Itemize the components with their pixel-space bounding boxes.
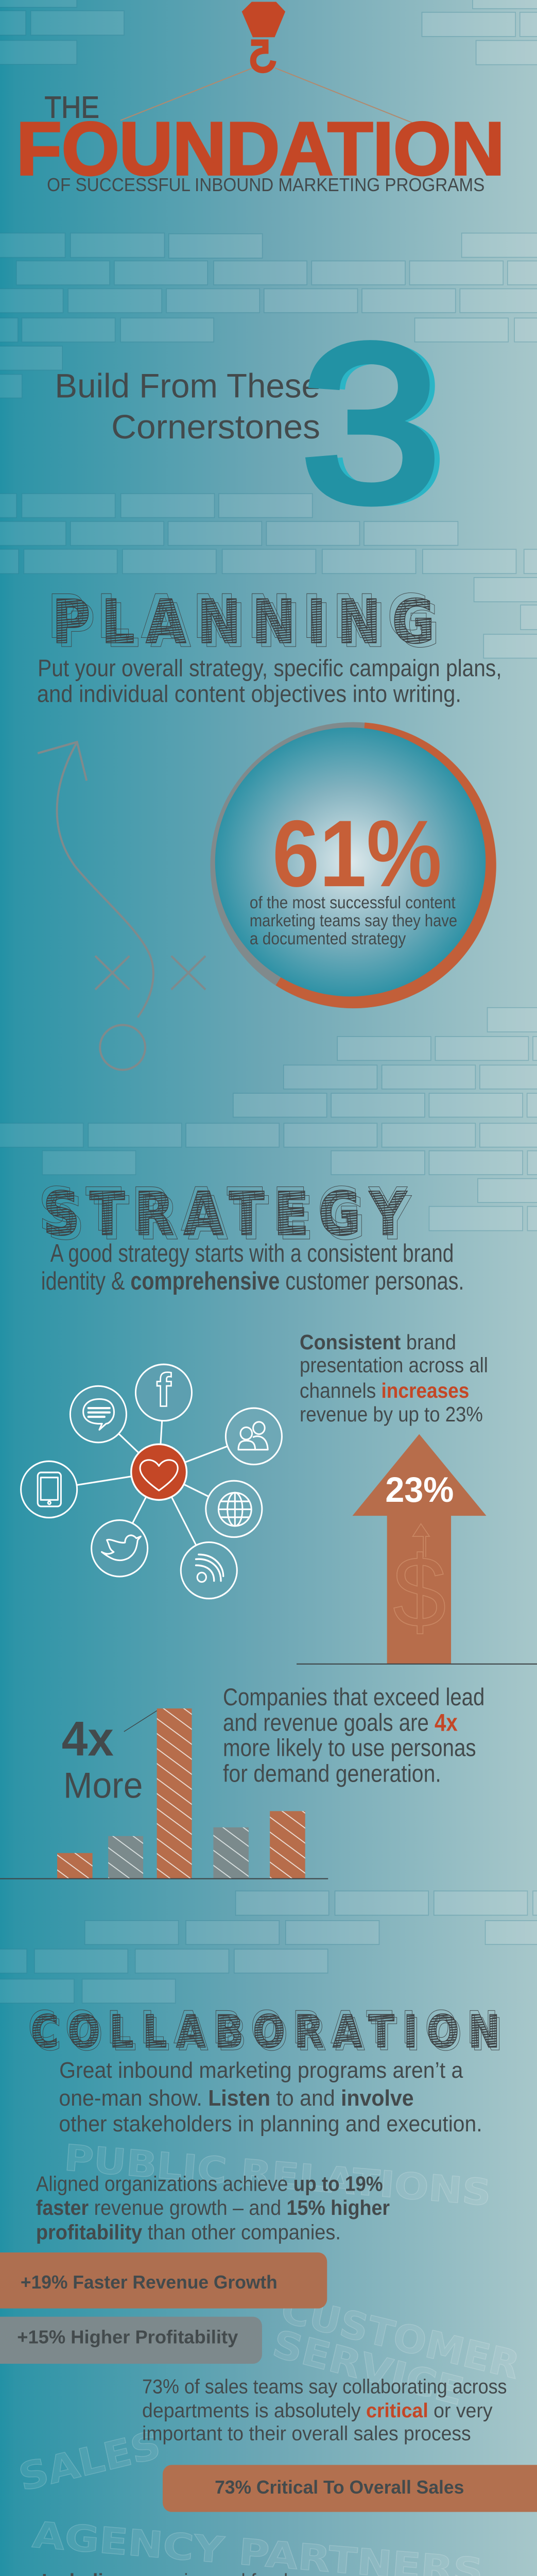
pill: critical to overall sales: 73% Critical To Overall Sales — [215, 2477, 464, 2498]
pill: higher profitability: +15% Higher Profitability — [17, 2327, 238, 2348]
heading: build from these cornerstones — [55, 367, 320, 446]
icon: play diagram with arrow — [38, 742, 205, 1070]
text: consistent brand presentation — [300, 1331, 488, 1426]
stat caption: marketing teams say they have — [250, 910, 457, 930]
stat caption — [250, 892, 457, 948]
arrow: 23% growth: 23% — [385, 1470, 454, 1510]
pill: faster revenue growth — [0, 2252, 327, 2309]
heading: build from these cornerstones: Cornerstones — [111, 408, 320, 446]
icon: crane hook — [120, 2, 413, 123]
planning intro text — [37, 654, 502, 707]
text: companies that exceed goals: Companies that exceed lead — [223, 1683, 484, 1710]
text: companies that exceed goals — [223, 1683, 484, 1787]
text: companies that exceed goals: for demand generation. — [223, 1759, 441, 1787]
heading: STRATEGY: STRATEGY — [43, 1179, 416, 1249]
big number 3: 3 — [307, 299, 448, 549]
ghost word: customer: CUSTOMER — [277, 2286, 524, 2387]
icon: rss — [196, 1554, 223, 1582]
section: personas — [0, 1683, 512, 2244]
stat value: 61% — [272, 801, 442, 906]
text: aligned organizations: faster revenue growth – and 15% higher — [36, 2196, 390, 2219]
collaboration intro text: one-man show. Listen to and involve — [59, 2086, 414, 2110]
collaboration intro text: Great inbound marketing programs aren’t a — [59, 2058, 463, 2082]
text: consistent brand presentation: channels increases — [300, 1379, 469, 1402]
heading: build from these cornerstones: Build From These — [55, 367, 320, 405]
stat caption: of the most successful content — [250, 892, 456, 912]
title: subtitle: OF SUCCESSFUL INBOUND MARKETING PROGRAMS — [47, 174, 484, 195]
text: aligned organizations: Aligned organizations achieve up to 19% — [36, 2173, 383, 2196]
heading: PLANNING: PLANNING — [57, 590, 451, 661]
pill: higher profitability — [0, 2317, 262, 2364]
label: 4x more: More — [63, 1766, 143, 1806]
text: consistent brand presentation: presentation across all — [300, 1354, 488, 1377]
ghost word: service: SERVICE — [269, 2321, 468, 2414]
heading: PLANNING: PLANNING — [47, 582, 441, 652]
text: consistent brand presentation: Consistent brand — [300, 1331, 456, 1354]
text: companies that exceed goals: more likely to use personas — [223, 1734, 476, 1761]
pill: critical to overall sales — [163, 2465, 537, 2512]
header section — [16, 2, 505, 549]
icon: bird — [102, 1535, 141, 1561]
network diagram: channels — [21, 1364, 282, 1599]
section: alignment stats — [0, 2252, 537, 2576]
title: FOUNDATION: FOUNDATION — [16, 107, 505, 191]
label: 4x more: 4x — [62, 1711, 114, 1766]
text: sales teams — [142, 2376, 507, 2445]
stat circle: 61% — [210, 722, 496, 1008]
heading: PLANNING: PLANNING — [52, 587, 446, 657]
ghost word: public relations: PUBLIC RELATIONS — [63, 2138, 493, 2214]
label: 4x more — [62, 1710, 158, 1806]
icon: globe — [218, 1493, 251, 1526]
section: planning — [37, 582, 502, 1070]
stat caption: a documented strategy — [250, 928, 406, 948]
icon: people — [238, 1422, 268, 1450]
section: strategy — [21, 1175, 537, 1664]
ghost word: sales: SALES — [15, 2422, 164, 2500]
strategy intro text: identity & comprehensive customer personas. — [41, 1267, 464, 1295]
collaboration intro text: other stakeholders in planning and execution. — [59, 2111, 482, 2136]
text: companies that exceed goals: and revenue goals are 4x — [223, 1709, 458, 1736]
icon: chat bubble — [83, 1399, 114, 1430]
heading: STRATEGY: STRATEGY — [39, 1175, 417, 1245]
icon: dollar with arrow: $ — [393, 1535, 446, 1649]
title: THE: THE — [44, 90, 99, 125]
heading: STRATEGY: STRATEGY — [47, 1183, 421, 1253]
icon: tablet — [38, 1472, 61, 1506]
pill: faster revenue growth: +19% Faster Revenue Growth — [21, 2272, 278, 2293]
text: aligned organizations: profitability than other companies. — [36, 2221, 341, 2244]
icon: facebook: f — [157, 1364, 171, 1416]
arrow: 23% growth — [297, 1434, 537, 1664]
text: aligned organizations — [36, 2173, 390, 2244]
planning intro text: Put your overall strategy, specific campaign plans, — [38, 654, 502, 682]
text: sales teams: departments is absolutely critical or very — [142, 2399, 493, 2422]
strategy intro text: A good strategy starts with a consistent brand — [50, 1240, 454, 1267]
text: sales teams: important to their overall sales process — [142, 2422, 471, 2445]
strategy intro text — [41, 1240, 464, 1295]
icon: heart hub — [131, 1444, 187, 1500]
planning intro text: and individual content objectives into writing. — [37, 680, 461, 707]
text: sales teams: 73% of sales teams say collaborating across — [142, 2376, 507, 2398]
collaboration intro text — [59, 2058, 482, 2136]
text: consistent brand presentation: revenue by up to 23% — [300, 1403, 483, 1426]
big number 3: 3 — [301, 298, 441, 548]
bar chart — [0, 1708, 328, 1879]
